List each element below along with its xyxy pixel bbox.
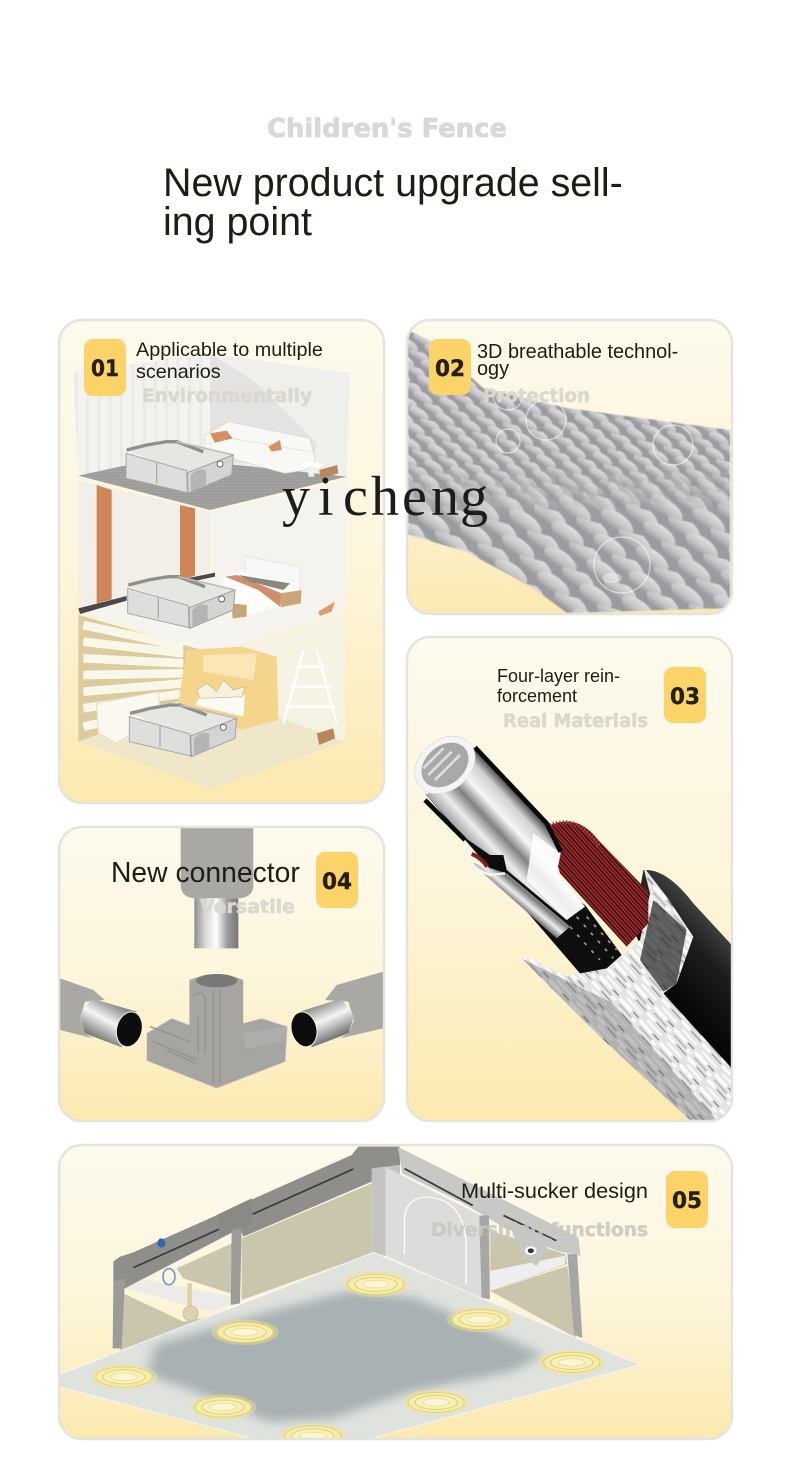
- panel 04: new connector: [59, 827, 384, 1121]
- panel 03: four-layer reinforcement: [403, 637, 733, 1130]
- panel 02: breathable technology: [407, 320, 732, 614]
- watermark: yicheng: yicheng: [282, 466, 488, 528]
- label: New connector: New connector: [111, 856, 300, 888]
- mat underside: [59, 1252, 640, 1442]
- label: 3D breathable technology: [477, 341, 678, 380]
- sublabel: Protection: Protection: [483, 385, 590, 407]
- label: Four-layer reinforcement: Four-layer rein-: [497, 666, 620, 686]
- badge 03: [664, 667, 706, 723]
- label: Applicable to multiple scenarios: scenarios: [136, 361, 221, 383]
- heading: New product upgrade selling point: ing point: [163, 200, 312, 244]
- badge 01: 01: [91, 357, 119, 382]
- bunk bed: [178, 647, 278, 730]
- sublabel: Diversified functions: Diversified functions: [431, 1219, 648, 1241]
- panel 05: multi-sucker design: [59, 1145, 732, 1449]
- badge 02: 02: [435, 357, 465, 382]
- illustration: corner connector and tubes: [60, 827, 383, 1088]
- illustration: layered tube cutaway: [403, 724, 733, 1130]
- label: Applicable to multiple scenarios: Applicable to multiple: [136, 339, 323, 361]
- sublabel: Environmentally: Environmentally: [142, 385, 313, 407]
- fence frame right side: [386, 1147, 582, 1338]
- badge 02: [429, 339, 471, 395]
- badge 05: [666, 1171, 708, 1228]
- sofa: [205, 422, 338, 478]
- illustration: knitted mesh with bubbles: [408, 330, 730, 613]
- label: 3D breathable technology: 3D breathable technol-: [477, 341, 678, 363]
- illustration: fence from below with suction cups: [59, 1147, 640, 1449]
- label: 3D breathable technology: ogy: [477, 358, 509, 380]
- title: Children's Fence: Children's Fence: [267, 114, 507, 144]
- badge 01: [84, 339, 126, 396]
- panel 01: multiple scenarios: [59, 320, 384, 803]
- sublabel: Versatile: Versatile: [200, 896, 295, 918]
- sublabel: Real Materials: Real Materials: [503, 710, 648, 732]
- label: Multi-sucker design: Multi-sucker design: [461, 1180, 648, 1203]
- label: Applicable to multiple scenarios: [136, 339, 323, 383]
- fence frame left side: [113, 1147, 400, 1352]
- badge 03: 03: [670, 685, 700, 710]
- bed: [223, 556, 335, 618]
- heading: New product upgrade selling point: New product upgrade sell-: [163, 161, 623, 205]
- badge 05: 05: [672, 1189, 702, 1214]
- label: Four-layer reinforcement: forcement: [497, 686, 577, 706]
- badge 04: [316, 852, 358, 908]
- heading: New product upgrade selling point: [163, 161, 623, 244]
- badge 04: 04: [322, 870, 352, 895]
- label: Four-layer reinforcement: [497, 666, 620, 706]
- illustration: three-storey house cutaway: [73, 353, 350, 788]
- shelf and crib: [97, 650, 337, 745]
